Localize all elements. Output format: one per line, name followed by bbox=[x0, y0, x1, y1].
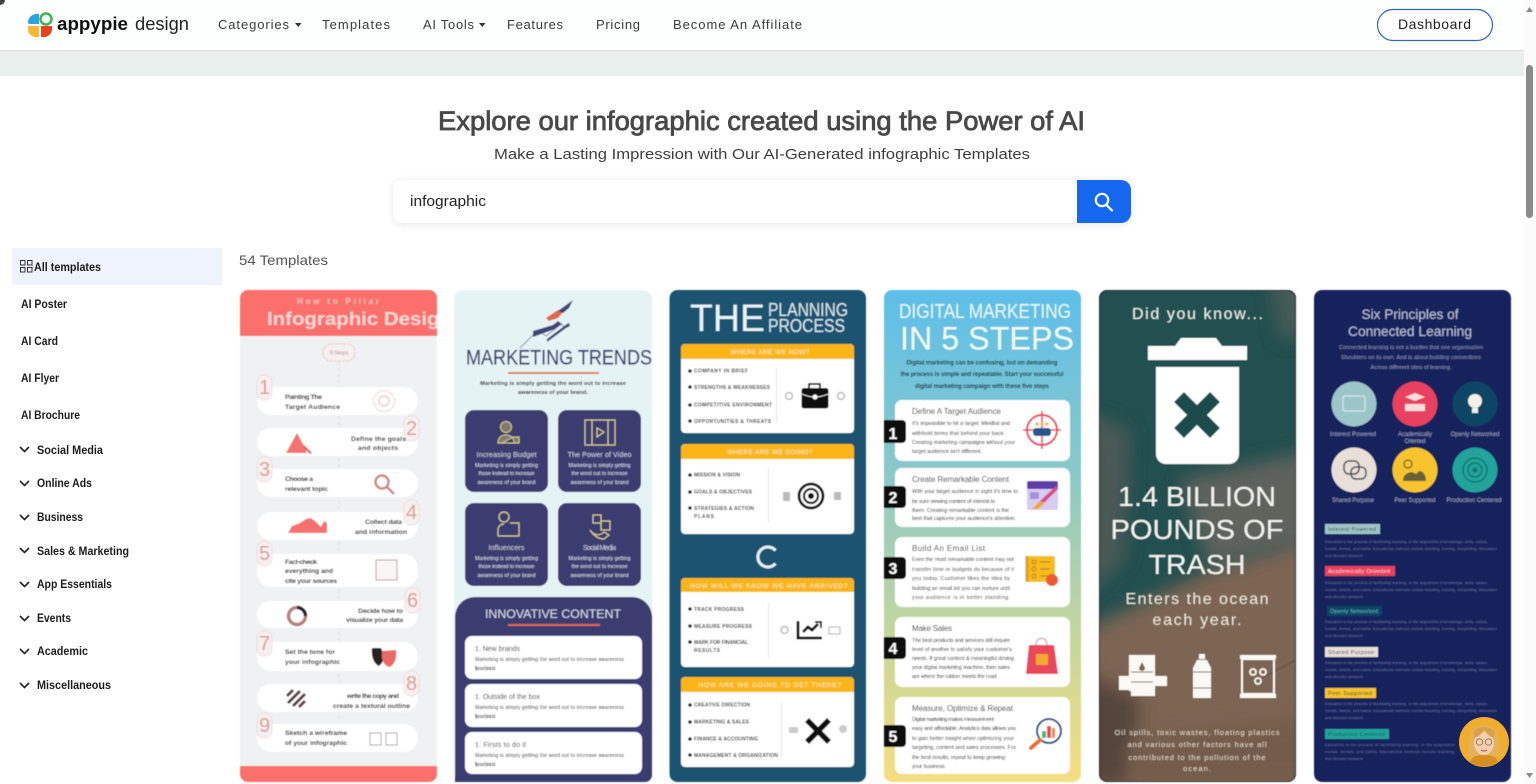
icon: video bbox=[585, 420, 615, 445]
section: where are we going: MISSION & VISION bbox=[694, 472, 740, 478]
principle descriptions: Peer Supported bbox=[1328, 691, 1372, 697]
statistic: 1.4 BILLION bbox=[1118, 481, 1276, 512]
principle descriptions: and directed research. bbox=[1325, 757, 1364, 761]
principle labels bbox=[1330, 432, 1502, 504]
innovative content panel: INNOVATIVE CONTENT bbox=[485, 607, 622, 621]
step numbers: 2 bbox=[406, 418, 417, 440]
panel: infographic design template: 9 Steps bbox=[330, 350, 349, 356]
icon: appypie logo bbox=[28, 14, 52, 37]
step number blocks bbox=[884, 420, 906, 747]
innovative content panel bbox=[455, 597, 652, 782]
step numbers: 8 bbox=[406, 673, 417, 695]
principle descriptions: Production Centered bbox=[1328, 732, 1385, 738]
section: where are we now: COMPETITIVE ENVIRONMENT bbox=[694, 402, 772, 408]
panel: digital marketing template: digital marketing campaign with these five steps bbox=[915, 384, 1050, 390]
step text: easy and affordable. Analytics data allows you bbox=[912, 726, 1016, 732]
scrollbar bbox=[1524, 0, 1536, 784]
white step cards bbox=[895, 400, 1070, 774]
panel: connected learning template: Shoulders on its own. And is about building connections bbox=[1341, 355, 1481, 361]
icon: refresh bbox=[758, 547, 776, 567]
step numbers: 6 bbox=[407, 590, 418, 612]
panel: infographic design template: Infographic Design bbox=[267, 308, 452, 329]
step labels: visualize your data bbox=[346, 617, 403, 624]
step labels bbox=[285, 394, 410, 747]
feature card text: the word out to increase bbox=[572, 564, 628, 570]
subtext bbox=[1126, 591, 1268, 629]
icon: chart bbox=[798, 621, 822, 638]
step labels: Fact-check bbox=[285, 559, 317, 566]
step labels: create a textural outline bbox=[333, 703, 410, 710]
step numbers: 5 bbox=[259, 543, 270, 565]
icon: influencers bbox=[498, 512, 519, 536]
step text bbox=[911, 407, 1018, 770]
section: where are we going: STRATEGIES & ACTION bbox=[694, 506, 754, 512]
principle descriptions: Education is the process of facilitating learning, or the acquisition bbox=[1325, 743, 1455, 747]
section: how are we going to get there: HOW ARE WE GOING TO GET THERE? bbox=[698, 682, 842, 689]
template count: 54 Templates bbox=[239, 252, 328, 268]
brand name bbox=[57, 14, 189, 34]
nav links bbox=[218, 17, 802, 32]
step text: Define A Target Audience bbox=[912, 407, 1002, 416]
step text: Digital marketing makes measurement bbox=[912, 717, 994, 723]
section: where are we now: COMPANY IN BRIEF bbox=[694, 368, 748, 374]
step labels: of your infographic bbox=[285, 740, 347, 747]
step text: Build An Email List bbox=[912, 544, 986, 553]
panel: marketing trends template: Marketing is simply getting the word out to increase bbox=[480, 381, 627, 387]
panel: digital marketing template bbox=[884, 290, 1081, 782]
footnote bbox=[1114, 728, 1280, 773]
step text: With your target audience in sight it's time to bbox=[912, 489, 1018, 495]
panel: digital marketing template: the process is simple and repeatable. Start your successful bbox=[900, 372, 1064, 378]
step labels: Painting The bbox=[285, 394, 322, 401]
step text: them. Creating remarkable content is the bbox=[912, 508, 1009, 514]
step text: be sure viewing content of interest to bbox=[912, 499, 995, 505]
step labels: Collect data bbox=[365, 519, 402, 526]
feature card text: Influencers bbox=[488, 543, 525, 552]
section: how are we going to get there: MARKETING & SALES bbox=[694, 720, 750, 726]
nav links: Templates bbox=[322, 17, 390, 32]
step text: targeting, content and sales processes. For bbox=[912, 745, 1016, 751]
search bar: infographic bbox=[410, 193, 487, 210]
panel: marketing trends template bbox=[454, 290, 652, 782]
panel: infographic design template: How to Pillar bbox=[297, 297, 379, 306]
section: how will we know: MEASURE PROGRESS bbox=[694, 624, 753, 630]
innovative content panel: 1. Firsts to do it bbox=[475, 742, 526, 749]
sidebar menu: Social Media bbox=[37, 443, 103, 457]
step number blocks: 3 bbox=[889, 561, 898, 578]
panel: planning process template: THE bbox=[690, 298, 765, 340]
step text: the best results, repeat to keep growing bbox=[912, 755, 1005, 761]
principle labels: Academically bbox=[1398, 432, 1432, 438]
icon: shopping bag bbox=[1026, 638, 1058, 674]
feature card text: Social Media bbox=[583, 543, 616, 552]
panel: connected learning template: Connected learning is not a burden that one organisation bbox=[1339, 345, 1483, 351]
feature card text: awareness of your brand bbox=[478, 480, 536, 486]
principle descriptions: Interest Powered bbox=[1328, 527, 1376, 533]
innovative content panel: Marketing is simply getting the word out to increase awareness bbox=[475, 657, 624, 663]
subheading: Make a Lasting Impression with Our AI-Generated infographic Templates bbox=[494, 146, 1030, 163]
step numbers: 7 bbox=[259, 633, 270, 655]
principle labels: Interest Powered bbox=[1330, 432, 1376, 438]
step text: It's impossible to hit a target. Mindlist and bbox=[912, 421, 1010, 427]
feature card text: Marketing is simply getting bbox=[568, 556, 631, 562]
step text: building an email list you can nurture until bbox=[912, 586, 1010, 592]
sidebar menu bbox=[12, 248, 222, 692]
step labels: and objects bbox=[358, 445, 398, 452]
nav links: AI Tools bbox=[423, 17, 474, 32]
step labels: cite your sources bbox=[285, 578, 337, 585]
brand name: design bbox=[135, 14, 189, 34]
heading: Explore our infographic created using the Power of AI bbox=[438, 106, 1085, 136]
statistic: TRASH bbox=[1148, 549, 1246, 580]
nav links: Features bbox=[507, 17, 564, 32]
step numbers bbox=[257, 375, 420, 738]
announcement band bbox=[0, 51, 1524, 76]
section: where are we going: PLANS bbox=[694, 514, 715, 520]
step text: level of another to satisfy your customer's bbox=[912, 647, 1012, 653]
innovative content panel: flyour brand. bbox=[475, 666, 496, 672]
footnote: ocean. bbox=[1183, 764, 1211, 773]
panel: digital marketing template: Digital marketing can be confusing, but on demanding bbox=[906, 360, 1058, 366]
icon: grid bbox=[20, 260, 32, 272]
icon: oil barrel bbox=[1119, 655, 1167, 696]
sidebar menu: Events bbox=[37, 611, 71, 625]
section: where are we now: STRENGTHS & WEAKNESSES bbox=[694, 385, 771, 391]
principle labels: Shared Purpose bbox=[1332, 498, 1375, 504]
icon: budget bbox=[498, 422, 519, 443]
panel: connected learning template bbox=[1314, 290, 1511, 782]
step number blocks: 5 bbox=[889, 729, 898, 746]
step number blocks: 1 bbox=[889, 426, 898, 443]
footnote: contributed to the pollution of the bbox=[1128, 753, 1266, 762]
step numbers: 4 bbox=[406, 502, 417, 524]
principle descriptions: morals, beliefs, and habits. Educational methods include teaching, training, storytelling, discussion bbox=[1325, 588, 1497, 592]
panel: planning process template: PROCESS bbox=[768, 316, 845, 336]
sidebar menu: Academic bbox=[37, 644, 88, 658]
icon: chat assistant avatar bbox=[1459, 717, 1509, 767]
step text: withhold terms that behind your back. bbox=[911, 431, 1005, 437]
step text: Creating marketing campaigns without your bbox=[912, 440, 1015, 446]
panel: marketing trends template: MARKETING TRENDS bbox=[466, 346, 652, 370]
principle descriptions: Education is the process of facilitating learning, or the acquisition of knowledge, skills, values, bbox=[1325, 620, 1488, 624]
sidebar menu: Business bbox=[37, 510, 83, 524]
section: where are we now: WHERE ARE WE NOW? bbox=[730, 349, 810, 356]
section: where are we going: WHERE ARE WE GOING? bbox=[727, 449, 813, 456]
innovative content panel: Marketing is simply getting the word out to increase awareness bbox=[475, 753, 624, 759]
panel: digital marketing template: IN 5 STEPS bbox=[900, 320, 1074, 356]
statistic bbox=[1110, 481, 1284, 580]
nav links: Pricing bbox=[596, 17, 640, 32]
section: how are we going to get there: CREATIVE DIRECTION bbox=[694, 702, 750, 708]
principle descriptions bbox=[1325, 524, 1497, 761]
icon: analytics magnifier bbox=[1031, 719, 1061, 748]
icon: checklist bbox=[1027, 556, 1058, 586]
icon: crossed tools bbox=[807, 720, 829, 742]
step icons bbox=[1023, 411, 1061, 748]
dashboard button: Dashboard bbox=[1398, 16, 1471, 32]
icon: flying figure and rising arrow bbox=[520, 300, 573, 348]
principle descriptions: morals, beliefs, and habits. Educational methods include teaching, bbox=[1325, 750, 1455, 754]
feature card text: Marketing is simply getting bbox=[475, 556, 538, 562]
principle descriptions: Shared Purpose bbox=[1328, 650, 1374, 656]
footnote: Oil spills, toxic wastes, floating plastics bbox=[1114, 728, 1280, 737]
step labels: your infographic bbox=[285, 659, 340, 666]
step labels: write the copy and bbox=[346, 693, 399, 700]
icon: hazard sack bbox=[1240, 655, 1276, 698]
feature card text: Increasing Budget bbox=[476, 450, 536, 459]
nav links: Become An Affiliate bbox=[673, 17, 802, 32]
step labels: everything and bbox=[285, 568, 333, 575]
section: how will we know bbox=[681, 578, 854, 667]
step text: target audience isn't different. bbox=[912, 449, 982, 455]
step labels: Define the goals bbox=[351, 436, 406, 443]
principle labels: Oriented bbox=[1404, 439, 1426, 445]
principle descriptions: and directed research. bbox=[1325, 675, 1364, 679]
principle descriptions: and directed research. bbox=[1325, 634, 1364, 638]
step text: Create Remarkable Content bbox=[912, 475, 1010, 484]
search bar bbox=[393, 180, 1131, 224]
sidebar menu: AI Poster bbox=[21, 297, 67, 311]
sidebar menu: Sales & Marketing bbox=[37, 544, 129, 558]
step labels: Choose a bbox=[285, 476, 313, 483]
navigation bar bbox=[0, 0, 1524, 52]
innovative content panel: flyour brand. bbox=[475, 714, 496, 720]
principle descriptions: morals, beliefs, and habits. Educational methods include teaching, training, storytelling, discussion bbox=[1325, 547, 1497, 551]
principle labels: Openly Networked bbox=[1450, 432, 1500, 438]
principle descriptions: morals, beliefs, and habits. Educational methods include teaching, training, storytelling, discussion bbox=[1325, 627, 1497, 631]
sidebar menu: App Essentials bbox=[37, 577, 112, 591]
step number blocks: 2 bbox=[889, 490, 898, 507]
principle descriptions: Education is the process of facilitating learning, or the acquisition of knowledge, skills, values, bbox=[1325, 702, 1488, 706]
footnote: and various other factors have all bbox=[1128, 740, 1267, 749]
feature card text: those instead to increase bbox=[478, 564, 535, 570]
icon: trash bin bbox=[1148, 338, 1247, 464]
icon: social media bbox=[590, 515, 610, 539]
principle labels: Production Centered bbox=[1446, 498, 1502, 504]
step numbers: 9 bbox=[259, 715, 270, 737]
step labels: Set the tone for bbox=[285, 649, 335, 656]
step text: The best products and services still require bbox=[912, 638, 1010, 644]
principle descriptions: Education is the process of facilitating learning, or the acquisition of knowledge, skills, values, bbox=[1325, 661, 1488, 665]
principle descriptions: morals, beliefs, and habits. Educational methods include teaching, training, storytelling, discussion bbox=[1325, 709, 1497, 713]
section: where are we going bbox=[681, 444, 854, 534]
section: where are we going: GOALS & OBJECTIVES bbox=[694, 490, 753, 496]
panel: planning process template: PLANNING bbox=[768, 300, 848, 320]
step text: Even the most remarkable content may not bbox=[912, 557, 1014, 563]
section: how are we going to get there: MANAGEMENT & ORGANIZATION bbox=[694, 753, 778, 759]
step text: needs. If great content & meaningful driving bbox=[912, 656, 1014, 662]
step text: your business. bbox=[912, 764, 946, 770]
sidebar menu: Miscellaneous bbox=[37, 678, 111, 692]
feature card text: Marketing is simply getting bbox=[568, 463, 631, 469]
section: how will we know: MARK FOR FINANCIAL bbox=[694, 640, 748, 646]
icon: briefcase bbox=[802, 384, 828, 408]
step text: to gain better insight when optimizing your bbox=[912, 736, 1014, 742]
sidebar menu: AI Card bbox=[21, 334, 58, 348]
step labels: Target Audience bbox=[285, 404, 340, 411]
step text: your audience is in better standing. bbox=[912, 595, 1010, 601]
icon: search bbox=[1096, 194, 1112, 210]
sidebar menu: AI Brochure bbox=[21, 408, 80, 422]
step text: are where the rubber meets the road. bbox=[912, 674, 998, 680]
feature card text: awareness of your brand bbox=[570, 573, 629, 579]
step numbers: 3 bbox=[259, 459, 270, 481]
principle labels: Peer Supported bbox=[1394, 498, 1436, 504]
feature card text: the word out to increase bbox=[572, 471, 628, 477]
step text: you today. Customer likes the idea by bbox=[912, 576, 1010, 582]
sidebar menu: AI Flyer bbox=[21, 371, 59, 385]
step labels: Sketch a wireframe bbox=[285, 730, 347, 737]
principle descriptions: Academically Oriented bbox=[1328, 569, 1390, 575]
step text: transfer time or budgets do because of it bbox=[912, 567, 1014, 573]
brand name: appypie bbox=[57, 14, 128, 34]
principle descriptions: Education is the process of facilitating learning, or the acquisition of knowledge, skills, values, bbox=[1325, 581, 1488, 585]
pills bbox=[257, 387, 418, 752]
principle descriptions: Education is the process of facilitating learning, or the acquisition of knowledge, skills, values, bbox=[1325, 540, 1488, 544]
statistic: POUNDS OF bbox=[1110, 514, 1284, 545]
step labels: Decide how to bbox=[358, 608, 403, 615]
innovative content panel: Marketing is simply getting the word out to increase awareness bbox=[475, 705, 624, 711]
panel: infographic design template bbox=[240, 290, 452, 782]
step numbers: 1 bbox=[259, 377, 270, 399]
panel: ocean trash template bbox=[1098, 289, 1297, 783]
feature card text: Marketing is simply getting bbox=[475, 463, 538, 469]
icon: crosshair audience bbox=[1023, 411, 1061, 449]
section: how are we going to get there: FINANCE & ACCOUNTING bbox=[694, 736, 758, 742]
principle descriptions: and directed research. bbox=[1325, 716, 1364, 720]
section: how will we know: RESULTS bbox=[694, 648, 721, 654]
step number blocks: 4 bbox=[889, 641, 898, 658]
panel: connected learning template: Connected Learning bbox=[1348, 323, 1472, 339]
feature card text: awareness of your brand bbox=[478, 573, 536, 579]
step labels: and information bbox=[355, 529, 407, 536]
icon: target bbox=[799, 484, 823, 508]
feature card text: The Power of Video bbox=[568, 450, 632, 459]
section: how will we know: HOW WILL WE KNOW WE HAVE ARRIVED? bbox=[690, 583, 848, 590]
feature cards bbox=[465, 410, 641, 586]
sidebar menu: Online Ads bbox=[37, 476, 92, 490]
panel: digital marketing template: DIGITAL MARKETING bbox=[899, 301, 1071, 323]
dashboard button bbox=[1378, 10, 1492, 40]
section: how will we know: TRACK PROGRESS bbox=[694, 607, 745, 613]
step labels: relevant topic bbox=[285, 486, 328, 493]
principle descriptions: Openly Networked bbox=[1330, 609, 1378, 615]
step text: best that captures your audience's attention. bbox=[912, 516, 1016, 522]
step text: Make Sales bbox=[912, 624, 952, 633]
feature card text: awareness of your brand bbox=[570, 480, 629, 486]
icon: bottle bbox=[1193, 654, 1211, 698]
step text: Measure, Optimize & Repeat bbox=[912, 704, 1014, 713]
panel: planning process template bbox=[670, 290, 866, 782]
panel: marketing trends template: awareness of your brand. bbox=[518, 390, 588, 396]
panel: connected learning template: Across different sites of learning. bbox=[1370, 365, 1452, 371]
section: how are we going to get there bbox=[681, 677, 854, 767]
subtext: Enters the ocean bbox=[1126, 591, 1268, 608]
section: where are we now: OPPORTUNITIES & THREATS bbox=[694, 419, 772, 425]
section: where are we now bbox=[681, 344, 854, 433]
sidebar menu: All templates bbox=[34, 260, 101, 274]
feature card text: those instead to increase bbox=[478, 471, 535, 477]
nav links: Categories bbox=[218, 17, 290, 32]
subtext: each year. bbox=[1152, 612, 1242, 629]
principle circles bbox=[1332, 382, 1498, 492]
innovative content panel: 1. Outside of the box bbox=[475, 694, 540, 701]
innovative content panel: 1. New brands bbox=[475, 646, 520, 653]
principle descriptions: and directed research. bbox=[1325, 554, 1364, 558]
step icons bbox=[286, 390, 397, 745]
principle descriptions: and directed research. bbox=[1325, 595, 1364, 599]
principle descriptions: morals, beliefs, and habits. Educational methods include teaching, training, storytelling, discussion bbox=[1325, 668, 1497, 672]
feature card text bbox=[475, 450, 632, 579]
panel: ocean trash template: Did you know... bbox=[1132, 306, 1263, 323]
innovative content panel: flyour brand. bbox=[475, 762, 496, 768]
step text: your digital marketing machine, then sales bbox=[912, 665, 1010, 671]
panel: connected learning template: Six Principles of bbox=[1362, 306, 1459, 322]
icon: content brush bbox=[1027, 481, 1058, 510]
